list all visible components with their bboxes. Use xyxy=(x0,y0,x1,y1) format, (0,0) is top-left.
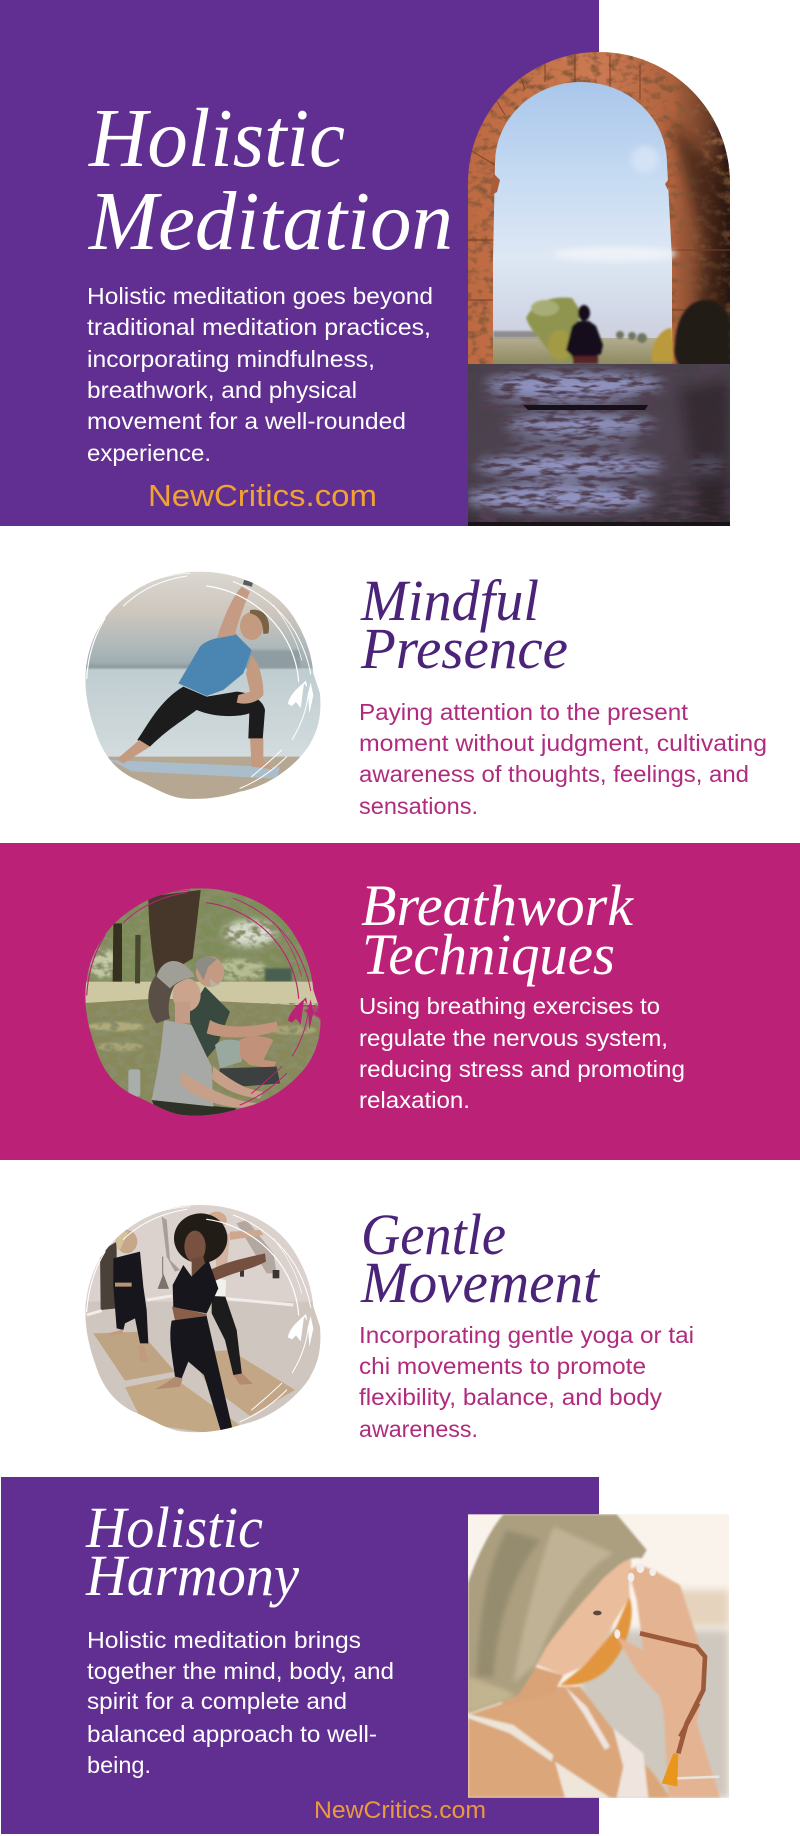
hero brand label: NewCritics.com xyxy=(148,478,377,513)
hero intro text: incorporating mindfulness, xyxy=(87,346,375,372)
section 1 photo: side-angle yoga pose on beach xyxy=(80,567,327,803)
section 2 heading: Techniques xyxy=(362,922,615,987)
section 1 text: awareness of thoughts, feelings, and xyxy=(359,761,749,787)
section 1 heading: Mindful xyxy=(360,568,539,633)
hero intro text: experience. xyxy=(87,440,211,466)
hero intro text: movement for a well-rounded xyxy=(87,408,406,434)
closing text: being. xyxy=(87,1752,151,1778)
section 2 text: Using breathing exercises to xyxy=(359,993,660,1019)
hero intro text: breathwork, and physical xyxy=(87,377,357,403)
section 3 text: flexibility, balance, and body xyxy=(359,1384,663,1410)
section 1 text: moment without judgment, cultivating xyxy=(359,730,767,756)
section 1 text xyxy=(359,699,767,819)
section 1 heading xyxy=(360,568,568,681)
section 2 text: relaxation. xyxy=(359,1087,470,1113)
section 3 text: awareness. xyxy=(359,1416,478,1442)
hero intro text xyxy=(87,283,433,466)
panel: hero background xyxy=(0,0,599,526)
hero intro text: Holistic meditation goes beyond xyxy=(87,283,433,309)
section 2 text: regulate the nervous system, xyxy=(359,1025,668,1051)
section 3 text: chi movements to promote xyxy=(359,1353,646,1379)
section 3 text xyxy=(359,1322,694,1442)
section 3 heading: Movement xyxy=(360,1250,601,1315)
section 3 text: Incorporating gentle yoga or tai xyxy=(359,1322,694,1348)
hero title: Holistic xyxy=(88,92,345,185)
closing brand label: NewCritics.com xyxy=(314,1797,486,1824)
section 2 heading xyxy=(361,873,634,987)
closing text: together the mind, body, and xyxy=(87,1658,394,1684)
hero title xyxy=(88,92,453,268)
closing heading xyxy=(85,1495,299,1608)
hero arch photo xyxy=(465,52,730,526)
section 3 heading xyxy=(360,1202,601,1315)
section 1 text: Paying attention to the present xyxy=(359,699,689,725)
section 3 heading: Gentle xyxy=(361,1202,506,1267)
section 2 photo: couple meditating in park xyxy=(85,888,320,1116)
panel: section 2 background xyxy=(0,843,800,1160)
closing heading: Harmony xyxy=(85,1543,299,1608)
section 3 photo: women in warrior pose in studio xyxy=(80,1200,327,1435)
hero intro text: traditional meditation practices, xyxy=(87,314,431,340)
closing text: spirit for a complete and xyxy=(87,1688,347,1714)
section 2 heading: Breathwork xyxy=(361,873,634,938)
section 2 text xyxy=(359,993,685,1113)
closing text: balanced approach to well- xyxy=(87,1721,377,1747)
section 2 text: reducing stress and promoting xyxy=(359,1056,685,1082)
section 1 text: sensations. xyxy=(359,793,478,819)
closing text xyxy=(87,1627,394,1778)
panel: closing background xyxy=(1,1477,599,1834)
section 1 heading: Presence xyxy=(360,616,568,681)
closing photo: woman with prayer beads xyxy=(468,1514,729,1798)
closing text: Holistic meditation brings xyxy=(87,1627,361,1653)
hero title: Meditation xyxy=(88,175,453,268)
closing heading: Holistic xyxy=(85,1495,263,1560)
